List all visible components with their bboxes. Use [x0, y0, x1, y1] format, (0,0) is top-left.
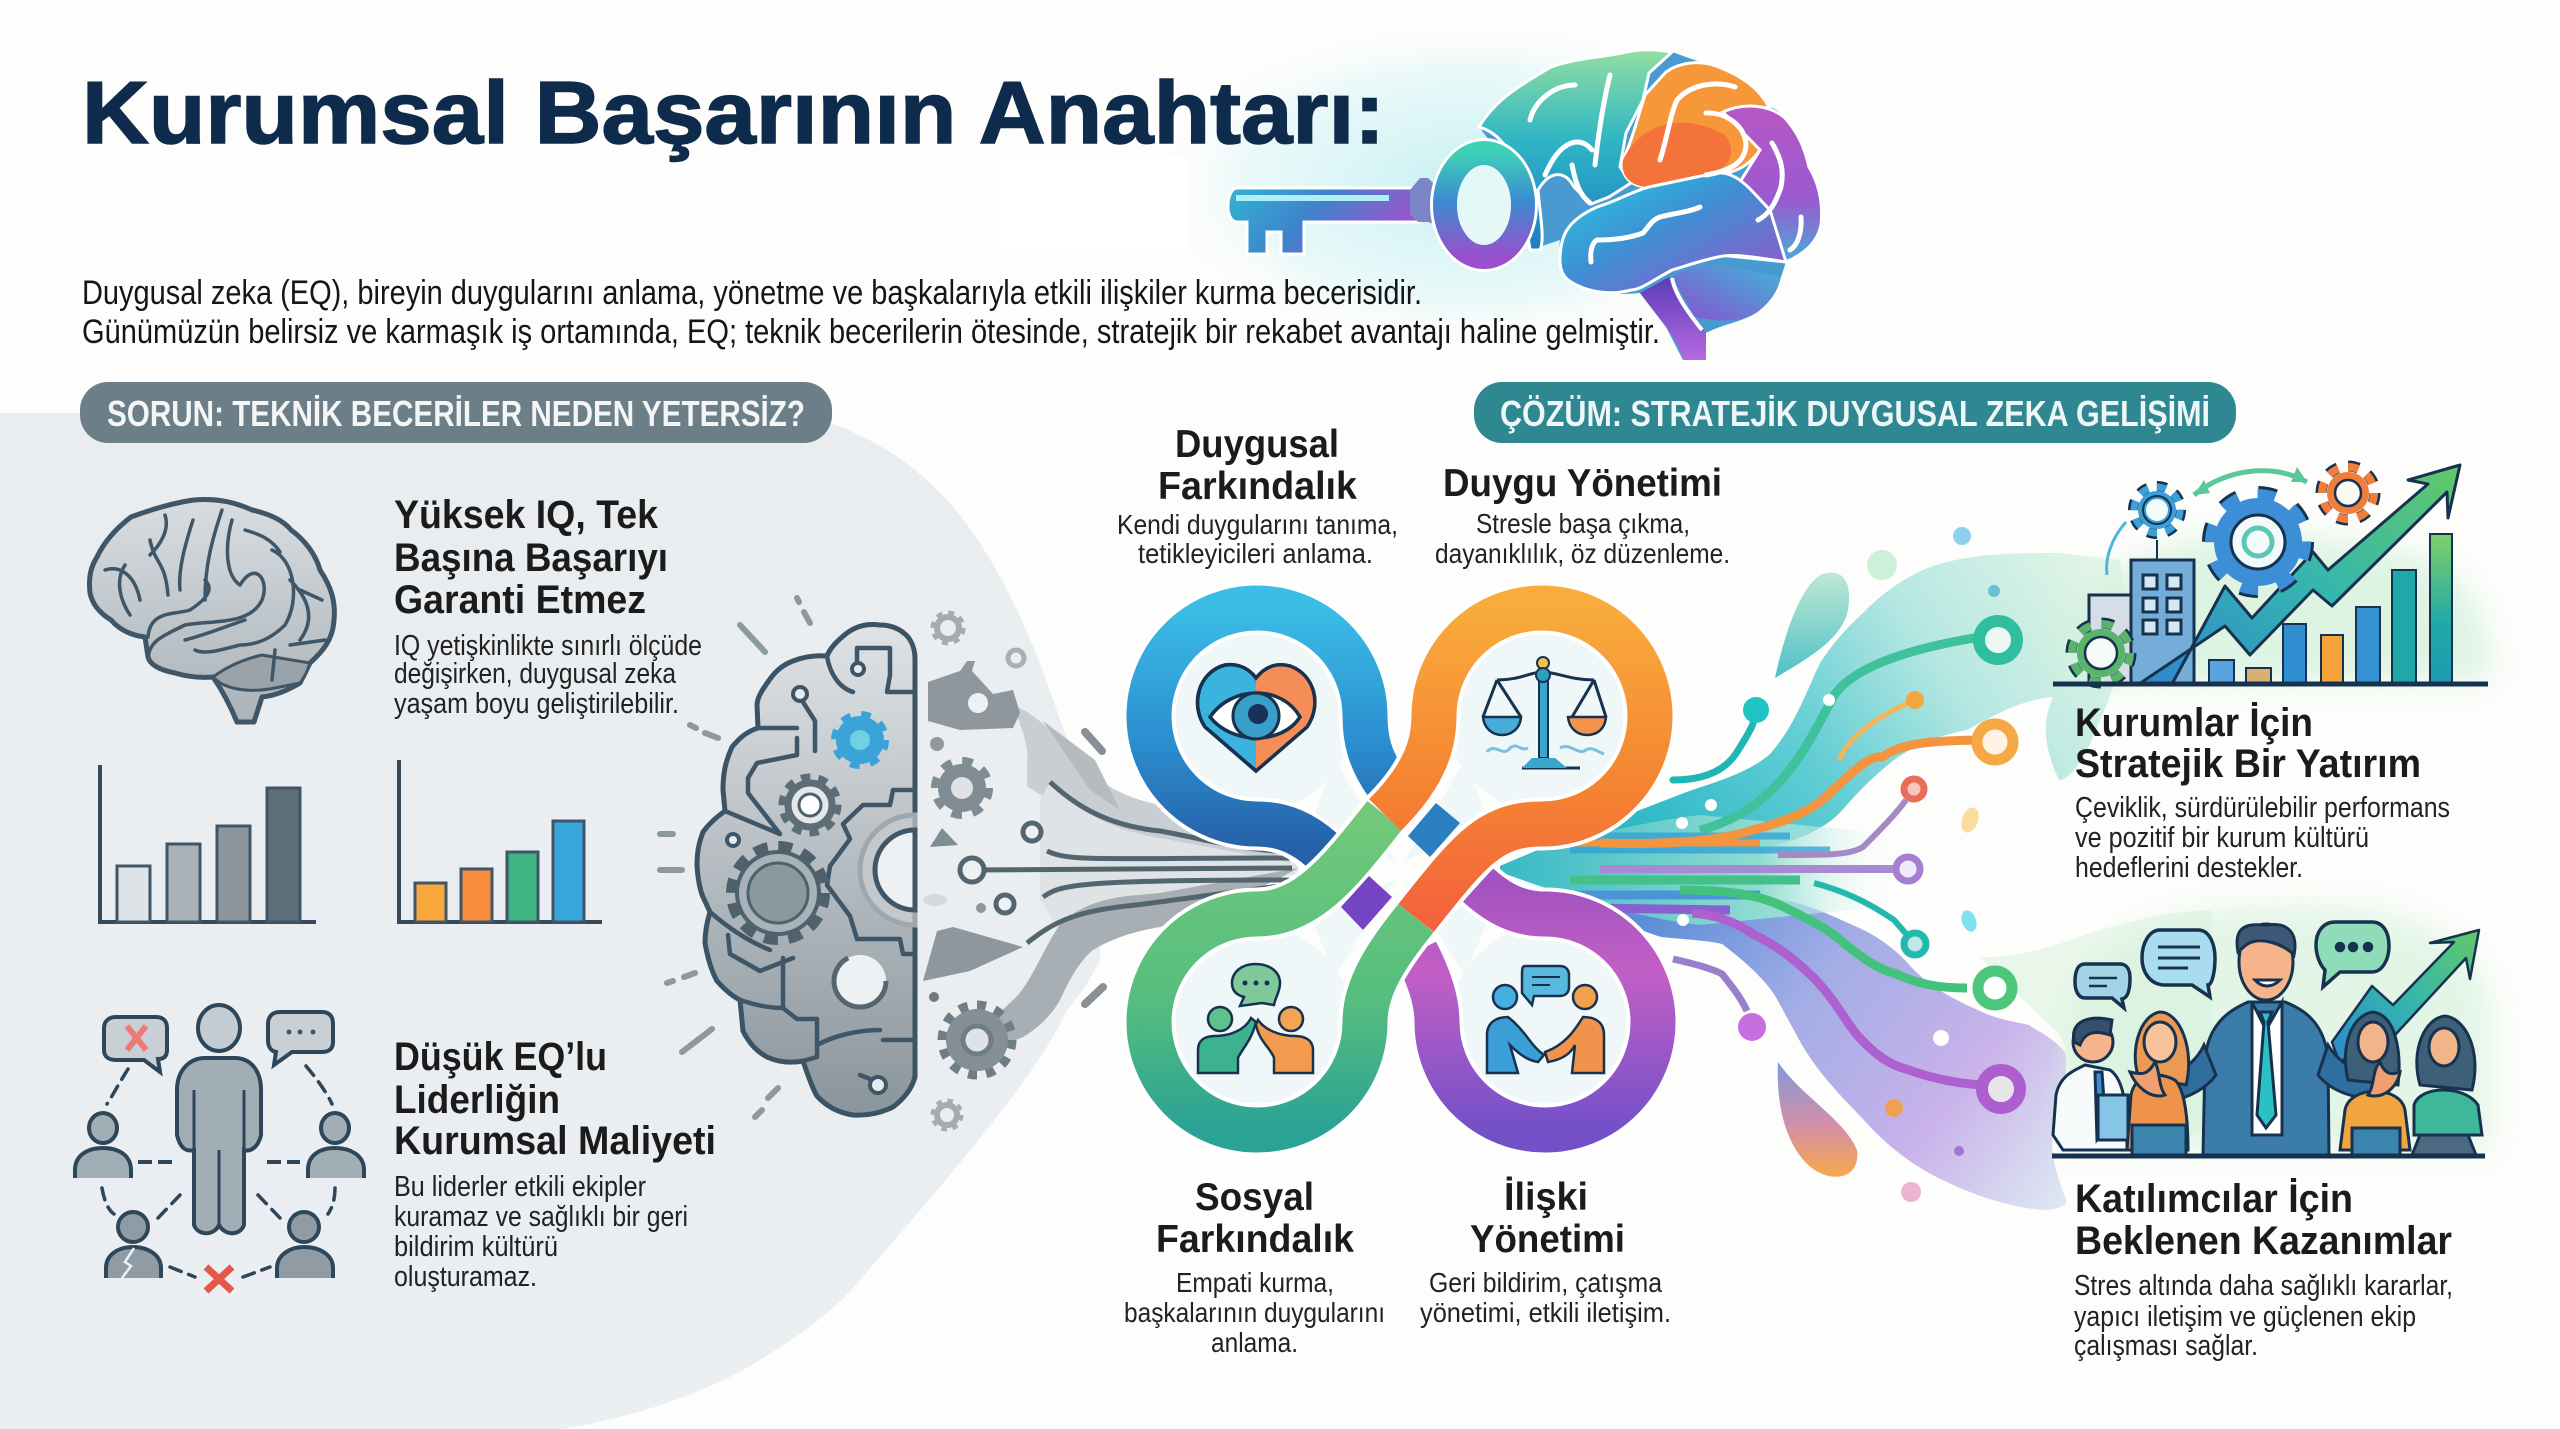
grey data streams — [960, 705, 1298, 1045]
text: high IQ — [394, 493, 702, 720]
heading: Kurumlar İçin — [2075, 701, 2313, 745]
knot: green ribbon — [1149, 815, 1416, 1130]
team member: woman right — [2340, 1012, 2410, 1155]
knot: diamonds — [1341, 803, 1460, 930]
heading — [2075, 701, 2421, 786]
icon: gears brain — [697, 624, 915, 1115]
heading: solution: ÇÖZÜM: STRATEJİK DUYGUSAL ZEKA GELİŞİMİ — [1500, 393, 2210, 434]
droplets and dots — [1676, 527, 2000, 1202]
heading: solution — [1474, 382, 2236, 443]
knot: blue ribbon — [1149, 608, 1387, 850]
icon: handshake and speech bubble — [1487, 966, 1604, 1073]
description: yapıcı iletişim ve güçlenen ekip — [2074, 1301, 2416, 1333]
label: emotion management: Stresle başa çıkma, — [1476, 508, 1690, 539]
icon: team with leader — [2052, 905, 2490, 1156]
speech bubbles — [2075, 922, 2389, 1008]
description: Stres altında daha sağlıklı kararlar, — [2074, 1270, 2453, 1302]
icon: supportive people — [1198, 964, 1313, 1073]
label: emotion management — [1435, 462, 1730, 569]
leader hands — [2130, 1062, 2400, 1096]
heading: problem — [80, 382, 832, 443]
knot: white halo — [1149, 608, 1653, 1130]
description — [394, 630, 702, 720]
panel: problem background — [0, 413, 1100, 1429]
label: emotion management: dayanıklılık, öz düzenleme. — [1435, 538, 1730, 569]
debris: right half gears and plates — [660, 598, 1103, 1128]
description — [2074, 1270, 2453, 1362]
label: relationship management — [1420, 1176, 1671, 1328]
colour data streams — [1500, 527, 2212, 1210]
label: relationship management: yönetimi, etkili iletişim. — [1420, 1297, 1671, 1328]
bar chart: colour — [399, 760, 602, 922]
icon: corporate growth chart — [2053, 465, 2490, 685]
half ring gear — [860, 815, 915, 925]
lower branches — [1814, 883, 1915, 944]
key — [1228, 188, 1420, 254]
label: social awareness: Sosyal — [1195, 1176, 1314, 1219]
heading: problem: SORUN: TEKNİK BECERİLER NEDEN YETERSİZ? — [107, 393, 805, 434]
bar chart: grey — [100, 765, 316, 922]
label: social awareness: Empati kurma, — [1176, 1267, 1334, 1298]
description — [394, 1171, 688, 1293]
green branch — [1700, 637, 1980, 830]
intro text: Duygusal zeka (EQ), bireyin duygularını anlama, yönetme ve başkalarıyla etkili ilişkiler kurma becerisidir. — [82, 274, 1422, 312]
heading: Düşük EQ’lu — [394, 1035, 607, 1079]
text: corporate investment — [2075, 701, 2450, 884]
heading: Kurumsal Maliyeti — [394, 1119, 716, 1163]
upper stream — [1500, 553, 2124, 870]
heading: Garanti Etmez — [394, 578, 646, 622]
small inner gear — [783, 778, 837, 832]
heading: Beklenen Kazanımlar — [2075, 1219, 2452, 1263]
label: social awareness: başkalarının duygularını — [1124, 1297, 1385, 1328]
description: oluşturamaz. — [394, 1261, 537, 1293]
label: social awareness: anlama. — [1211, 1327, 1298, 1358]
text: participant gains — [2074, 1177, 2453, 1362]
knot: orange ribbon — [1385, 608, 1650, 918]
label: social awareness — [1124, 1176, 1385, 1358]
ring nodes — [1738, 621, 2020, 1108]
heading — [394, 1035, 716, 1163]
centre band — [1500, 815, 1900, 925]
gears — [2133, 486, 2181, 534]
buildings — [2089, 560, 2194, 684]
description: değişirken, duygusal zeka — [394, 658, 677, 690]
label: relationship management: İlişki — [1504, 1176, 1588, 1219]
team member: woman far right — [2412, 1016, 2482, 1155]
label: relationship management: Geri bildirim, çatışma — [1429, 1267, 1662, 1298]
rising arrow — [2332, 930, 2479, 1065]
main figure — [177, 1005, 261, 1233]
label: emotional awareness: Kendi duygularını tanıma, — [1117, 509, 1398, 540]
team member: man — [2053, 1018, 2128, 1150]
description — [2075, 792, 2450, 884]
heading: Liderliğin — [394, 1078, 560, 1122]
description: ve pozitif bir kurum kültürü — [2075, 822, 2369, 854]
team member: woman left — [2127, 1012, 2189, 1155]
left half brain — [697, 624, 915, 1115]
growth arrow — [2139, 465, 2460, 684]
orange branch — [1600, 740, 1992, 843]
central four-part knot — [1149, 608, 1653, 1130]
large inner gear — [731, 846, 825, 940]
label: emotional awareness: Farkındalık — [1158, 465, 1357, 508]
intro text: Günümüzün belirsiz ve karmaşık iş ortamında, EQ; teknik becerilerin ötesinde, stratejik bir rekabet avantajı haline gelmiştir. — [82, 313, 1660, 351]
label: emotional awareness: Duygusal — [1175, 423, 1339, 466]
brain sulci — [1530, 75, 1801, 262]
knot: loop fills — [1162, 621, 1640, 1117]
label: emotional awareness — [1117, 423, 1398, 569]
icon: key and colourful brain — [1000, 20, 1822, 360]
icon: low EQ leader team — [75, 1005, 364, 1291]
bars — [2209, 534, 2452, 684]
heading: Başına Başarıyı — [394, 536, 668, 580]
label: emotion management: Duygu Yönetimi — [1443, 462, 1722, 505]
label: social awareness: Farkındalık — [1156, 1218, 1354, 1261]
lower stream — [1500, 868, 2066, 1210]
description: kuramaz ve sağlıklı bir geri — [394, 1201, 688, 1233]
pale green backdrop — [1980, 910, 2212, 1150]
description: Çeviklik, sürdürülebilir performans — [2075, 792, 2450, 824]
icon: balance scale — [1483, 657, 1606, 768]
label: emotional awareness: tetikleyicileri anlama. — [1138, 538, 1373, 569]
description: IQ yetişkinlikte sınırlı ölçüde — [394, 630, 702, 662]
text: low EQ leadership — [394, 1035, 716, 1293]
intro text — [82, 274, 1660, 351]
heading: Stratejik Bir Yatırım — [2075, 742, 2421, 786]
icon: heart and eye — [1198, 665, 1315, 771]
violet branch — [1778, 800, 1906, 855]
brain silhouette — [1479, 52, 1822, 360]
description: hedeflerini destekler. — [2075, 852, 2303, 884]
description: Bu liderler etkili ekipler — [394, 1171, 646, 1203]
description: bildirim kültürü — [394, 1231, 558, 1263]
knot: purple ribbon — [1416, 885, 1653, 1130]
description: yaşam boyu geliştirilebilir. — [394, 688, 679, 720]
heading — [394, 493, 668, 622]
title: Kurumsal Başarının Anahtarı: — [82, 63, 1385, 162]
heading: Yüksek IQ, Tek — [394, 493, 659, 537]
heading: Katılımcılar İçin — [2075, 1177, 2353, 1221]
heading — [2075, 1177, 2452, 1263]
broken lower gear — [834, 955, 886, 1007]
leader — [2146, 924, 2390, 1155]
icon: grey brain — [89, 499, 334, 722]
broken blue gear — [836, 716, 884, 764]
teal branch and dot — [1673, 723, 1753, 780]
label: relationship management: Yönetimi — [1470, 1218, 1625, 1261]
description: çalışması sağlar. — [2074, 1330, 2258, 1362]
